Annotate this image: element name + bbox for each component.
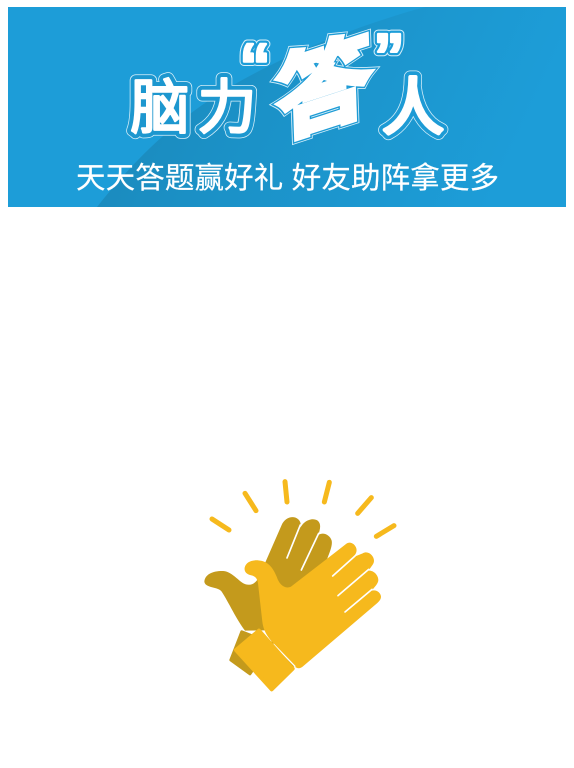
title character: 人: 人 [382,74,444,143]
back hand [204,517,333,674]
title character: 人: 人 [382,74,444,143]
icon: clapping hands [204,482,394,689]
title character: 人: 人 [382,74,444,143]
title character: stylised 答: 答 [274,20,374,157]
opening quotation mark: “ [240,32,270,101]
applause rays [212,482,394,536]
subtitle: 天天答题赢好礼 好友助阵拿更多 [76,162,499,195]
front hand [245,543,381,668]
title [130,20,444,157]
closing quotation mark: ” [374,22,404,91]
title characters: 脑力: 力 [197,75,257,141]
title characters: 脑力: 力 [197,75,257,141]
cuff [236,631,293,689]
title characters: 脑力: 脑 [130,75,190,141]
closing quotation mark: ” [374,22,404,91]
title characters: 脑力: 脑 [130,75,190,141]
closing quotation mark: ” [374,22,404,91]
title characters: 脑力 [130,75,257,141]
title character: stylised 答: 答 [274,20,374,157]
banner panel [8,7,566,207]
opening quotation mark: “ [240,32,270,101]
title characters: 脑力: 力 [197,75,257,141]
title characters: 脑力: 脑 [130,75,190,141]
opening quotation mark: “ [240,32,270,101]
title character: stylised 答: 答 [274,20,374,157]
